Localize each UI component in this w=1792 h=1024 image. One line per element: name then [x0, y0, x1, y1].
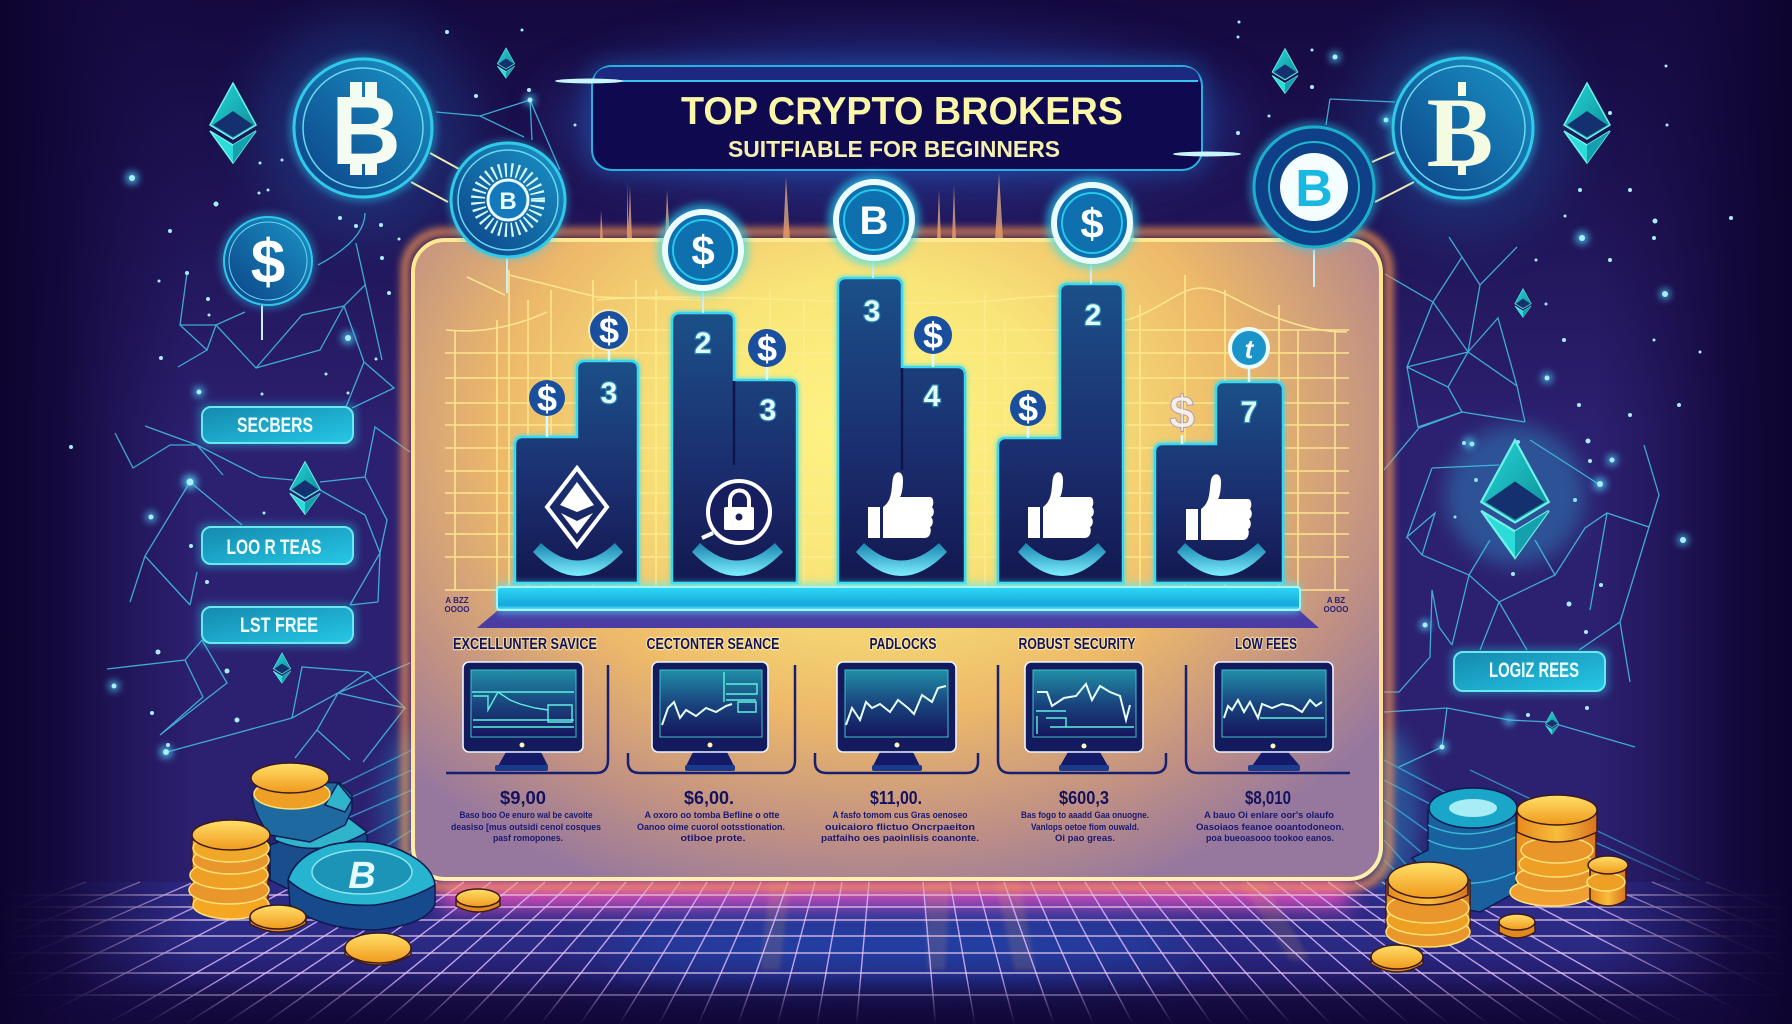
bar group 4: [998, 284, 1123, 583]
icon: smile arc: [692, 543, 783, 576]
description 1: deasiso [mus outsidi cenol cosques: [451, 822, 601, 832]
coin: dollar top 1: $: [691, 227, 715, 274]
value label: 2: [695, 327, 711, 360]
large blue token: B: [348, 855, 376, 897]
coin: bitcoin seal: B: [499, 188, 517, 215]
axis label left: [445, 596, 469, 614]
side light streaks: [300, 750, 1700, 885]
icon: large ethereum right: [1445, 425, 1585, 565]
icon: smile arc: [856, 543, 947, 576]
axis label right: A BZ: [1327, 596, 1345, 605]
small dollar coins: $: [1169, 386, 1195, 438]
monitor 3: [837, 662, 956, 771]
small dollar coins: $: [599, 310, 619, 351]
description 3: A fasfo tomom cus Gras oenoseo: [832, 810, 968, 820]
description 4: Bas fogo to aaadd Gaa onuogne.: [1021, 810, 1149, 820]
bar group 3: [838, 278, 965, 583]
small dollar coins: $: [757, 328, 777, 369]
value label: 3: [601, 377, 617, 410]
loose coins right: [1371, 914, 1535, 972]
axis label right: [1324, 596, 1348, 614]
coin pile: left: [189, 763, 500, 965]
gold stack: [189, 820, 270, 919]
axis label left: OOOO: [445, 605, 469, 614]
price 1: $9,00: [500, 788, 546, 808]
coin: dollar left: [220, 213, 316, 309]
icon: ethereum top right: [1272, 49, 1298, 93]
icon: small ethereum lower left: [273, 653, 291, 683]
icon: padlock: [702, 481, 770, 543]
blue token stack right: [1412, 788, 1520, 912]
price 4: $600,3: [1059, 788, 1109, 808]
main panel: [405, 232, 1389, 887]
side pill: low fees: LOO R TEAS: [226, 536, 322, 559]
monitor 4: [1025, 662, 1143, 771]
icon: smile arc: [1018, 543, 1106, 576]
price 5: $8,010: [1245, 788, 1291, 808]
coin: bitcoin right: [1249, 122, 1379, 252]
description 2: A oxoro oo tomba Befline o otte: [644, 810, 780, 820]
description 2: Oanoo oime cuorol ootsstionation.: [637, 822, 785, 832]
stars: [69, 20, 1733, 758]
gold stack right: [1510, 795, 1597, 906]
value label: 2: [1085, 299, 1101, 332]
value label: 3: [760, 394, 776, 427]
bar group 1: [515, 361, 638, 583]
coin: dollar top 2: $: [1080, 200, 1104, 247]
icon: smile arc: [533, 543, 623, 576]
monitor 5: [1214, 662, 1333, 771]
description 3: patfaiho oes paoinlisis coanonte.: [821, 833, 979, 843]
side pill: right: LOGIZ REES: [1489, 659, 1579, 682]
feature label: robust security: ROBUST SECURITY: [1018, 636, 1136, 653]
shelf underside: [477, 611, 1319, 628]
axis label left: A BZZ: [445, 596, 469, 605]
chart grid: [445, 270, 1349, 590]
description 4: Vanlops oetoe fiom ouwald.: [1031, 822, 1139, 832]
description 4: [1021, 810, 1149, 843]
coin: large bitcoin left: [289, 54, 437, 202]
description 2: otiboe prote.: [680, 833, 746, 843]
icon: thumbs up: [1186, 474, 1252, 540]
description 5: Oasoiaos feanoe ooantodoneon.: [1196, 822, 1344, 832]
value label: 7: [1241, 396, 1257, 429]
bracket dividers: [446, 665, 1350, 773]
description 2: [637, 810, 785, 843]
small dollar coins: $: [1018, 388, 1038, 429]
side pill: seekers: [198, 403, 357, 447]
small dollar coins: [529, 310, 1268, 444]
icon: ethereum diamond top left: [210, 83, 256, 163]
side pill: free: LST FREE: [240, 614, 318, 637]
feature label: excellent service: EXCELLUNTER SAVICE: [453, 636, 597, 653]
bar group 2: [672, 313, 797, 583]
description 3: [821, 810, 979, 843]
axis label right: OOOO: [1324, 605, 1348, 614]
icon: small ethereum right: [1515, 289, 1531, 317]
description 1: pasf romopones.: [493, 833, 563, 843]
side pill: low fees: [198, 523, 357, 568]
icon: small ethereum left: [290, 462, 320, 514]
price 2: $6,00.: [684, 788, 734, 808]
monitor 2: [652, 662, 768, 771]
large blue token: [288, 842, 435, 930]
coin: bitcoin seal: [448, 140, 568, 260]
small dollar coins: t: [1245, 334, 1255, 364]
small dollar coins: $: [537, 378, 557, 419]
coin: large bitcoin right: [1388, 53, 1538, 203]
coin: dollar left: $: [251, 228, 285, 297]
icon: thumbs up: [1028, 472, 1094, 538]
coin: bitcoin top: B: [860, 199, 888, 243]
side pill: free: [198, 603, 357, 647]
small stack right: [1587, 856, 1628, 906]
description 1: [451, 810, 601, 843]
description 5: [1196, 810, 1344, 843]
description 4: Oi pao greas.: [1055, 833, 1115, 843]
constellation network: [107, 99, 1659, 767]
value label: 4: [924, 380, 941, 413]
description 5: poa bueoasooo tookoo eanos.: [1206, 833, 1334, 843]
feature label: low fees: LOW FEES: [1235, 636, 1297, 653]
monitor 1: [463, 662, 583, 771]
feature label: padlocks: PADLOCKS: [870, 636, 937, 653]
coin pile: right: [1371, 788, 1628, 972]
icon: ethereum diamond: [547, 468, 607, 546]
floor grid: [0, 730, 1792, 1024]
title text: TOP CRYPTO BROKERS: [681, 90, 1123, 133]
coin: dollar top 1: [657, 204, 749, 296]
coin: large bitcoin left: B: [331, 76, 401, 185]
icon: tiny ethereum right: [1545, 711, 1559, 735]
side pill: seekers: SECBERS: [237, 414, 313, 437]
icon: thumbs up: [868, 472, 934, 538]
description 1: Baso boo Oe enuro wal be cavoite: [460, 810, 592, 820]
title banner: [555, 60, 1241, 240]
icon: ethereum diamond right: [1564, 83, 1610, 163]
icon: smile arc: [1177, 543, 1266, 576]
icon: small ethereum top: [497, 48, 515, 78]
feature label: customer service: CECTONTER SEANCE: [646, 636, 780, 653]
side pill: right: [1450, 648, 1609, 695]
coin: bitcoin top: [828, 174, 920, 266]
price 3: $11,00.: [870, 788, 922, 808]
description 5: A bauo Oi enlare oor's olaufo: [1204, 810, 1335, 820]
coin: dollar top 2: [1046, 177, 1138, 269]
description 3: ouicaioro flictuo Oncrpaeiton: [825, 822, 975, 832]
small dollar coins: $: [923, 315, 943, 356]
blue token stack: [252, 782, 367, 895]
subtitle text: SUITFIABLE FOR BEGINNERS: [728, 136, 1060, 162]
shelf: [497, 583, 1300, 613]
loose coins: [250, 889, 500, 965]
bar group 5: [1155, 382, 1283, 583]
coin: large bitcoin right: B: [1427, 77, 1493, 188]
value label: 3: [864, 295, 880, 328]
connector lines to large coins: [262, 152, 1414, 340]
gold stack top: [251, 763, 330, 809]
coin: bitcoin right: B: [1295, 160, 1333, 218]
gold stack front: [1386, 862, 1470, 948]
